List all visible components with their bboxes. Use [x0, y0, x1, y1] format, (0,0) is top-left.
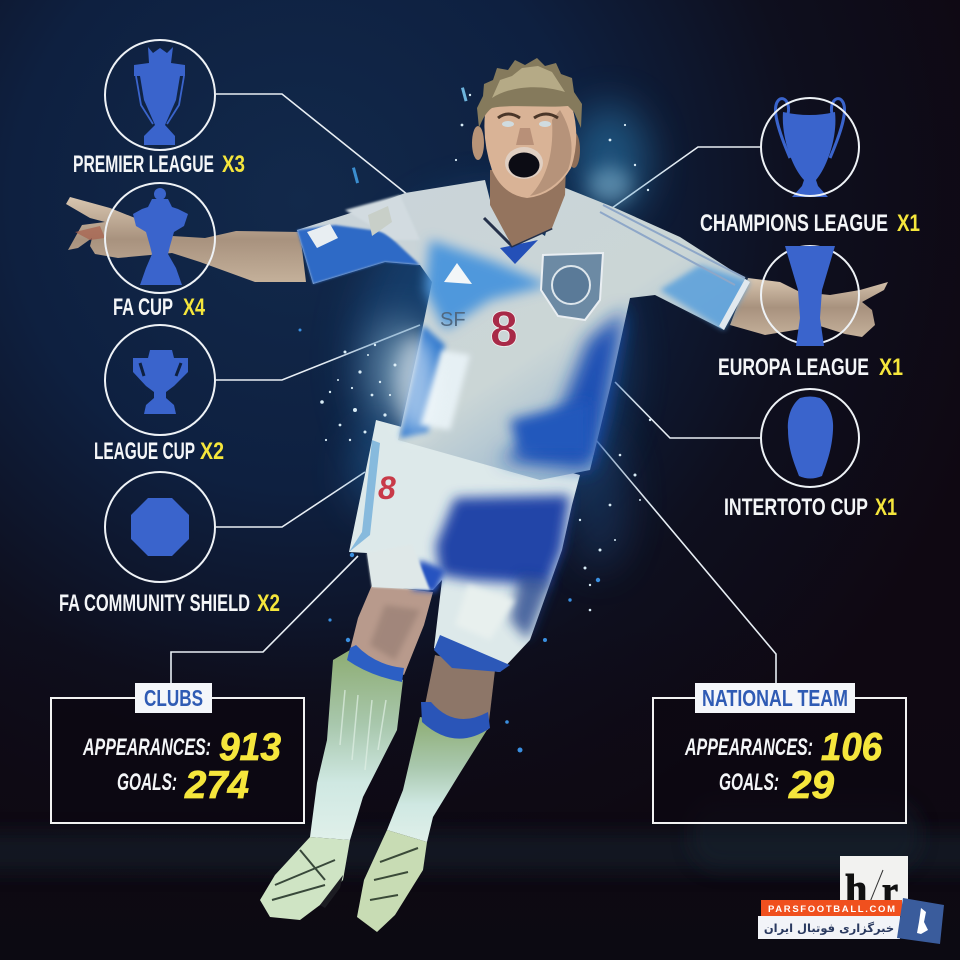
panel: national team: 29 [788, 764, 834, 807]
player illustration [66, 58, 888, 932]
label: champions league: X1 [897, 210, 920, 237]
icon: fa cup [105, 183, 215, 293]
player: shirt [297, 180, 750, 480]
connector lines [171, 94, 776, 697]
player: crest [541, 253, 603, 320]
watermark banner: PARSFOOTBALL.COM [768, 904, 895, 915]
label: europa league: EUROPA LEAGUE [718, 354, 869, 381]
label: europa league: X1 [879, 354, 903, 381]
icon: europa league [761, 246, 859, 346]
icon: intertoto cup [761, 389, 859, 487]
white paint highlight [396, 335, 436, 435]
player: far leg and boot [357, 655, 495, 932]
logo: bleacher report: h [845, 866, 867, 911]
panel: national team [653, 683, 906, 823]
paint splatter particles [298, 87, 651, 753]
panel: clubs: 274 [184, 764, 249, 807]
label: champions league: CHAMPIONS LEAGUE [700, 210, 888, 237]
icon: league cup [105, 325, 215, 435]
label: intertoto cup: INTERTOTO CUP [724, 494, 868, 521]
label: premier league: PREMIER LEAGUE [73, 151, 214, 178]
player: shirt number 8: 8 [490, 301, 518, 357]
panel: clubs: GOALS: [117, 769, 177, 796]
panel: national team: NATIONAL TEAM [702, 685, 848, 711]
panel: national team: APPEARANCES: [684, 734, 813, 761]
logo: bleacher report [840, 856, 908, 911]
player: head [472, 58, 582, 198]
label: fa cup: X4 [183, 294, 205, 321]
label: league cup: LEAGUE CUP [94, 438, 195, 465]
player: shorts number 8: 8 [378, 470, 396, 506]
watermark banner: خبرگزاری فوتبال ایران [764, 921, 894, 936]
player: shorts [349, 420, 580, 672]
label: community shield: FA COMMUNITY SHIELD [59, 590, 250, 617]
label: league cup: X2 [200, 438, 224, 465]
panel: national team: GOALS: [719, 769, 779, 796]
panel: clubs: APPEARANCES: [82, 734, 211, 761]
watermark banner [758, 898, 944, 944]
player: shirt logo [444, 263, 472, 284]
panel: clubs: 913 [219, 726, 281, 769]
panel: clubs: CLUBS [144, 685, 203, 711]
panel: clubs [51, 683, 304, 823]
panel: national team: 106 [821, 726, 882, 769]
splash glow behind player [350, 105, 648, 570]
label: premier league: X3 [222, 151, 245, 178]
label: fa cup: FA CUP [113, 294, 173, 321]
player: shirt name: SF [440, 309, 466, 331]
player: neck [490, 165, 566, 246]
logo: bleacher report: r [882, 870, 898, 910]
label: intertoto cup: X1 [875, 494, 897, 521]
icon: community shield [105, 472, 215, 582]
player: left arm and hand [66, 197, 306, 282]
icon: premier league [105, 40, 215, 150]
label: community shield: X2 [257, 590, 280, 617]
player: near leg and boot [260, 585, 433, 920]
icon: champions league [761, 98, 859, 197]
player: right arm and hand [730, 278, 888, 337]
